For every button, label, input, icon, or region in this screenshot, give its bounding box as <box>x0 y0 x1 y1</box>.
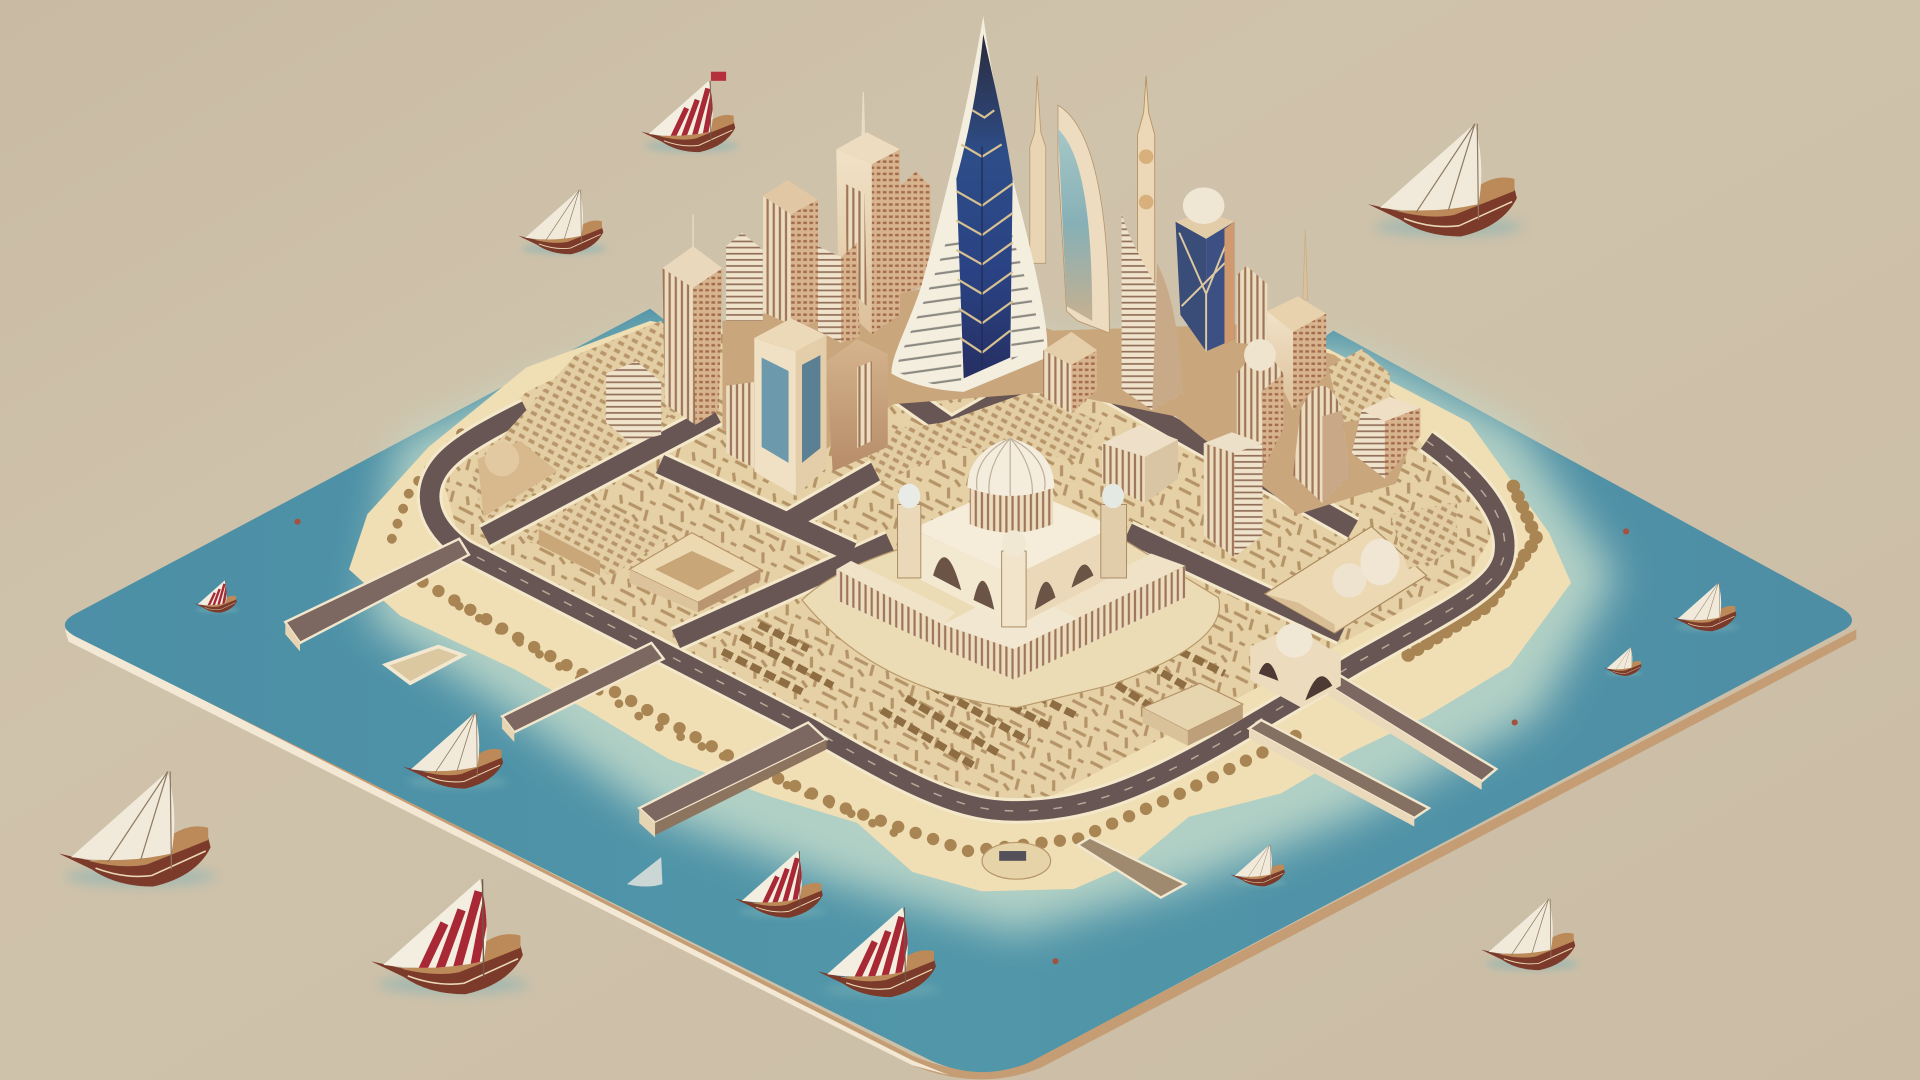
tower: domed right <box>1237 339 1283 468</box>
bridge: south-west causeway <box>502 643 664 742</box>
boat: upper left small <box>518 190 607 254</box>
mosque body <box>912 484 1114 627</box>
tower: grey striped <box>818 242 860 343</box>
lane marks <box>465 441 1505 811</box>
parking area <box>722 624 1224 765</box>
tower: rear minaret <box>1030 76 1046 263</box>
ground texture <box>441 331 1496 802</box>
tower: far back striped <box>726 233 763 321</box>
boat: lower left large <box>59 771 217 887</box>
office block in centre right <box>1102 425 1178 503</box>
boat: bottom red <box>818 907 941 997</box>
west low-rise district <box>471 321 686 520</box>
main sail tower <box>891 16 1047 392</box>
grand mosque <box>802 438 1219 708</box>
road network <box>430 382 1505 811</box>
right colonnade <box>1014 553 1185 680</box>
tower: tall minaret <box>1138 76 1155 282</box>
boat: small red in sea <box>735 851 826 918</box>
tower: small back <box>900 171 931 294</box>
sand-coloured blocks right <box>1329 349 1390 422</box>
east low-rise district <box>1265 502 1457 633</box>
left colonnade <box>836 561 955 649</box>
boat: in sea left <box>403 713 507 789</box>
tower: centre small <box>1043 332 1097 414</box>
buoys <box>294 519 1629 964</box>
floating dock <box>386 647 463 683</box>
central blocks <box>857 392 1102 484</box>
palm trees along the coast <box>392 429 1537 851</box>
dense blocks behind the skyline <box>722 288 1420 514</box>
bridge: west causeway <box>285 539 469 651</box>
mosque forecourt <box>802 527 1219 708</box>
domed gate <box>1250 623 1341 708</box>
tower: domed glass lattice <box>1176 187 1234 351</box>
boat: east sea <box>1673 583 1739 631</box>
road surface <box>430 382 1505 811</box>
bridge: south causeway <box>639 722 827 838</box>
tower: blue windows front <box>726 318 888 496</box>
tower: sail shaped white <box>1122 214 1183 410</box>
tower: right back <box>1237 266 1267 345</box>
minaret right <box>1101 484 1127 578</box>
boat: east sea tiny <box>1603 647 1643 676</box>
tower: curved glass <box>1058 105 1109 333</box>
island sand <box>349 321 1571 891</box>
tower: terracotta <box>763 180 818 331</box>
bridge: east causeway <box>1329 676 1496 790</box>
gatehouse block <box>1142 683 1243 746</box>
dome drum <box>970 484 1053 533</box>
sea platform <box>65 309 1856 1079</box>
tower: far left striped <box>662 214 722 425</box>
block west of mosque <box>523 496 667 576</box>
tower: tall cream <box>836 92 900 334</box>
front plinth <box>943 588 1078 680</box>
bridge: south-east pier <box>1249 720 1429 827</box>
square courtyard building <box>629 533 760 612</box>
tower: far right block <box>1352 397 1420 479</box>
round plaza on the beach <box>982 842 1051 879</box>
road casing <box>430 382 1505 811</box>
boat: lower left red <box>371 879 529 994</box>
shallow water halo <box>367 337 1616 933</box>
boat: west sea tiny <box>194 580 238 613</box>
minaret front <box>1002 530 1026 627</box>
city ground <box>441 331 1496 802</box>
central dome <box>967 438 1054 496</box>
boat: ghost sail <box>627 857 662 887</box>
tower: spired right <box>1267 229 1326 410</box>
minaret left <box>898 484 921 578</box>
boat: bottom centre small <box>1230 845 1287 886</box>
boat: lower right <box>1481 899 1579 970</box>
boat: upper right large <box>1368 124 1523 236</box>
pier: southern jetty <box>1078 838 1185 898</box>
tower: striped front right <box>1204 432 1262 557</box>
tower: lattice white right <box>1293 386 1349 503</box>
boat: top red dhow <box>641 72 739 152</box>
